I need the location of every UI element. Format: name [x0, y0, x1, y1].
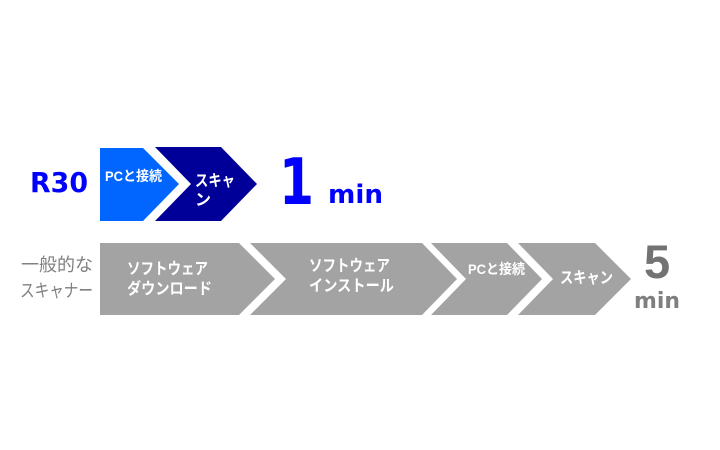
step: software download: ソフトウェア: [127, 260, 208, 278]
step: software download: ダウンロード: [127, 279, 212, 298]
label: R30: R30: [30, 166, 88, 199]
label: typical scanner: 一般的な: [21, 255, 93, 275]
step: scan: スキャ: [195, 173, 235, 190]
step: PC connection: PCと接続: [105, 168, 162, 184]
time: 5 min: min: [634, 289, 680, 314]
step: software install: ソフトウェア: [309, 257, 390, 275]
row: R30: [30, 146, 383, 221]
time: 1 min: 1: [279, 146, 314, 220]
time: 1 min: [279, 146, 383, 220]
step: scan: スキャン: [560, 270, 613, 287]
step: software install: インストール: [309, 278, 394, 295]
step: PC connection: PCと接続: [468, 261, 525, 277]
step: scan: [518, 243, 631, 315]
step: software install: [250, 243, 457, 315]
row: typical scanner: [20, 235, 680, 315]
time: 5 min: 5: [644, 235, 670, 288]
step: PC connection: [100, 148, 179, 221]
step: PC connection: [431, 243, 542, 315]
step: software download: [100, 243, 275, 315]
step: scan: ン: [195, 192, 211, 209]
time: 1 min: min: [328, 180, 383, 210]
time: 5 min: [634, 235, 680, 314]
label: typical scanner: スキャナー: [20, 281, 93, 301]
step: scan: [155, 147, 257, 221]
